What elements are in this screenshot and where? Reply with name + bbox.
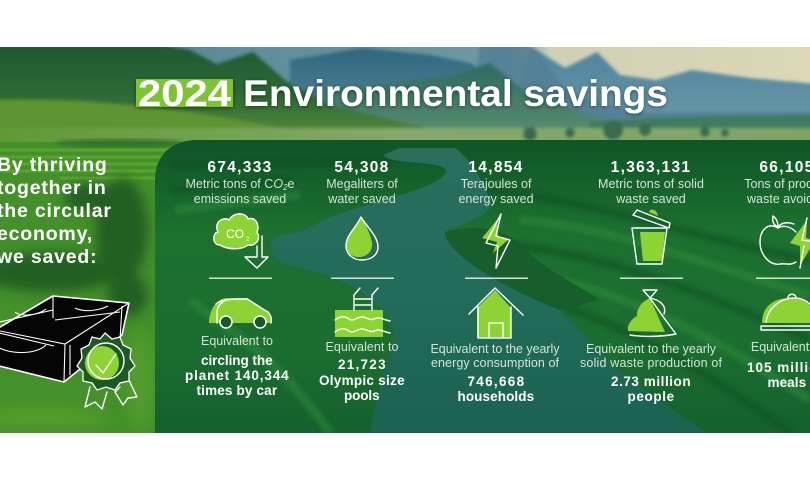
stat: emissions: 674,333 [207,159,273,176]
stat: emissions [186,159,295,206]
title: Environmental savings [243,73,668,114]
equivalence text: Olympic size [319,373,405,388]
stat: solid waste [598,159,704,206]
icon: apple and bolt [760,216,810,268]
equivalence text: people [628,389,675,404]
icon: house [469,288,523,338]
divider [756,278,810,279]
equivalence text [185,334,289,398]
icon: black crate with award rosette [0,296,137,409]
column 3: energy [430,159,560,404]
left intro text: By thriving [0,154,108,176]
equivalence text [747,340,810,390]
left intro text [0,154,112,268]
equivalence text: energy consumption of [431,356,560,370]
equivalence text: Equivalent to [201,334,273,348]
stat: water: water saved [327,192,396,206]
equivalence text [580,342,723,404]
stat: energy: Terajoules of [461,177,532,191]
equivalence text: circling the [201,353,273,368]
equivalence text: Equivalent to the yearly [430,342,560,356]
stat: energy: energy saved [458,192,534,206]
equivalence text: planet 140,344 [185,368,289,383]
divider [465,278,528,279]
icon: lightning bolt [482,214,510,268]
stat: water: 54,308 [334,159,390,176]
icon: water drop [346,217,378,260]
divider [331,278,394,279]
river [270,148,710,436]
stat: energy: 14,854 [468,159,524,176]
icon: CO2 cloud with down arrow: 2 [246,237,250,243]
stat: solid waste: Metric tons of solid [598,177,704,191]
divider [209,278,272,279]
stat: emissions: emissions saved [194,192,286,206]
icon: trash bin [632,210,670,264]
foreground field, left [0,142,182,433]
column 4: solid waste [580,159,723,404]
stat: emissions: Metric tons of CO [186,177,283,191]
left intro text: the circular [0,200,112,222]
icon: CO2 cloud with down arrow [214,214,268,268]
icon: tied waste bag [628,290,676,336]
left intro text: together in [0,177,107,199]
equivalence text: 21,723 [338,357,386,372]
icon: swimming pool [335,288,390,337]
title: 2024 [138,73,231,114]
stat: solid waste: 1,363,131 [611,159,691,176]
panel: dark green land and river [155,140,810,436]
stat: water: Megaliters of [326,177,398,191]
column 1: CO2 [185,159,295,398]
stat: solid waste: waste saved [615,192,686,206]
equivalence text: Equivalent to the yearly [586,342,717,356]
column 2: water [319,159,405,403]
stat: water [326,159,398,206]
icon: CO2 cloud with down arrow: CO [226,227,244,241]
equivalence text: 2.73 million [611,374,691,389]
icon: car [209,298,271,328]
equivalence text: households [458,389,534,404]
equivalence text [430,342,560,404]
equivalence text: solid waste production of [580,356,723,370]
stat: emissions: 2 [282,183,288,192]
equivalence text: 746,668 [468,374,525,389]
column 5: product waste (cropped at right edge) [744,159,810,390]
title highlight: 2024 [136,79,233,107]
stat: product waste [744,159,810,206]
icon: rosette [77,333,137,409]
stat: energy [458,159,534,206]
left intro text: we saved: [0,246,97,268]
equivalence text: meals [768,375,806,390]
equivalence text [319,340,405,403]
equivalence text: times by car [196,383,278,398]
equivalence text: Equivalent to [326,340,399,354]
icon: serving cloche [761,294,810,330]
divider [620,278,683,279]
stat: emissions: e [288,177,295,191]
equivalence text: pools [344,388,380,403]
